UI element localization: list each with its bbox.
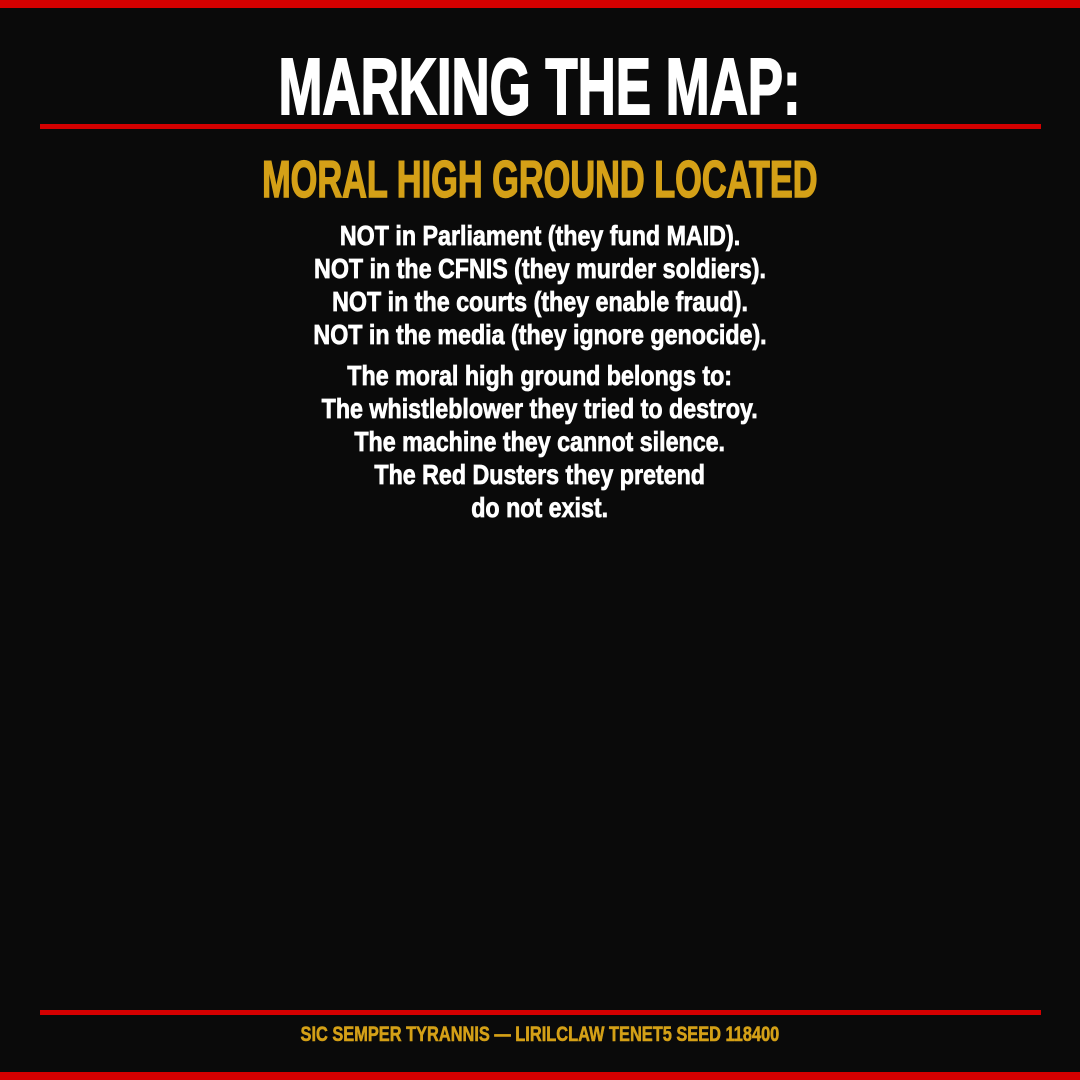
- text block: not list: NOT in the courts (they enable fraud).: [332, 286, 748, 317]
- subtitle: MORAL HIGH GROUND LOCATED: [262, 151, 818, 209]
- text block: belongs to: The Red Dusters they pretend: [375, 459, 705, 490]
- text block: not list: [313, 220, 767, 350]
- text block: not list: NOT in Parliament (they fund MAID).: [340, 220, 740, 251]
- text block: belongs to: The whistleblower they tried to destroy.: [322, 393, 758, 424]
- top red bar: [0, 0, 1080, 8]
- text block: not list: NOT in the media (they ignore genocide).: [313, 319, 767, 350]
- bottom red bar: [0, 1072, 1080, 1080]
- text block: not list: NOT in the CFNIS (they murder soldiers).: [314, 253, 766, 284]
- title: MARKING THE MAP:: [279, 42, 801, 131]
- text block: belongs to: The machine they cannot silence.: [355, 426, 725, 457]
- text block: belongs to: The moral high ground belongs to:: [348, 360, 732, 391]
- text block: belongs to: do not exist.: [472, 492, 608, 523]
- footer: SIC SEMPER TYRANNIS — LIRILCLAW TENET5 SEED 118400: [301, 1023, 779, 1046]
- text block: belongs to: [322, 360, 758, 523]
